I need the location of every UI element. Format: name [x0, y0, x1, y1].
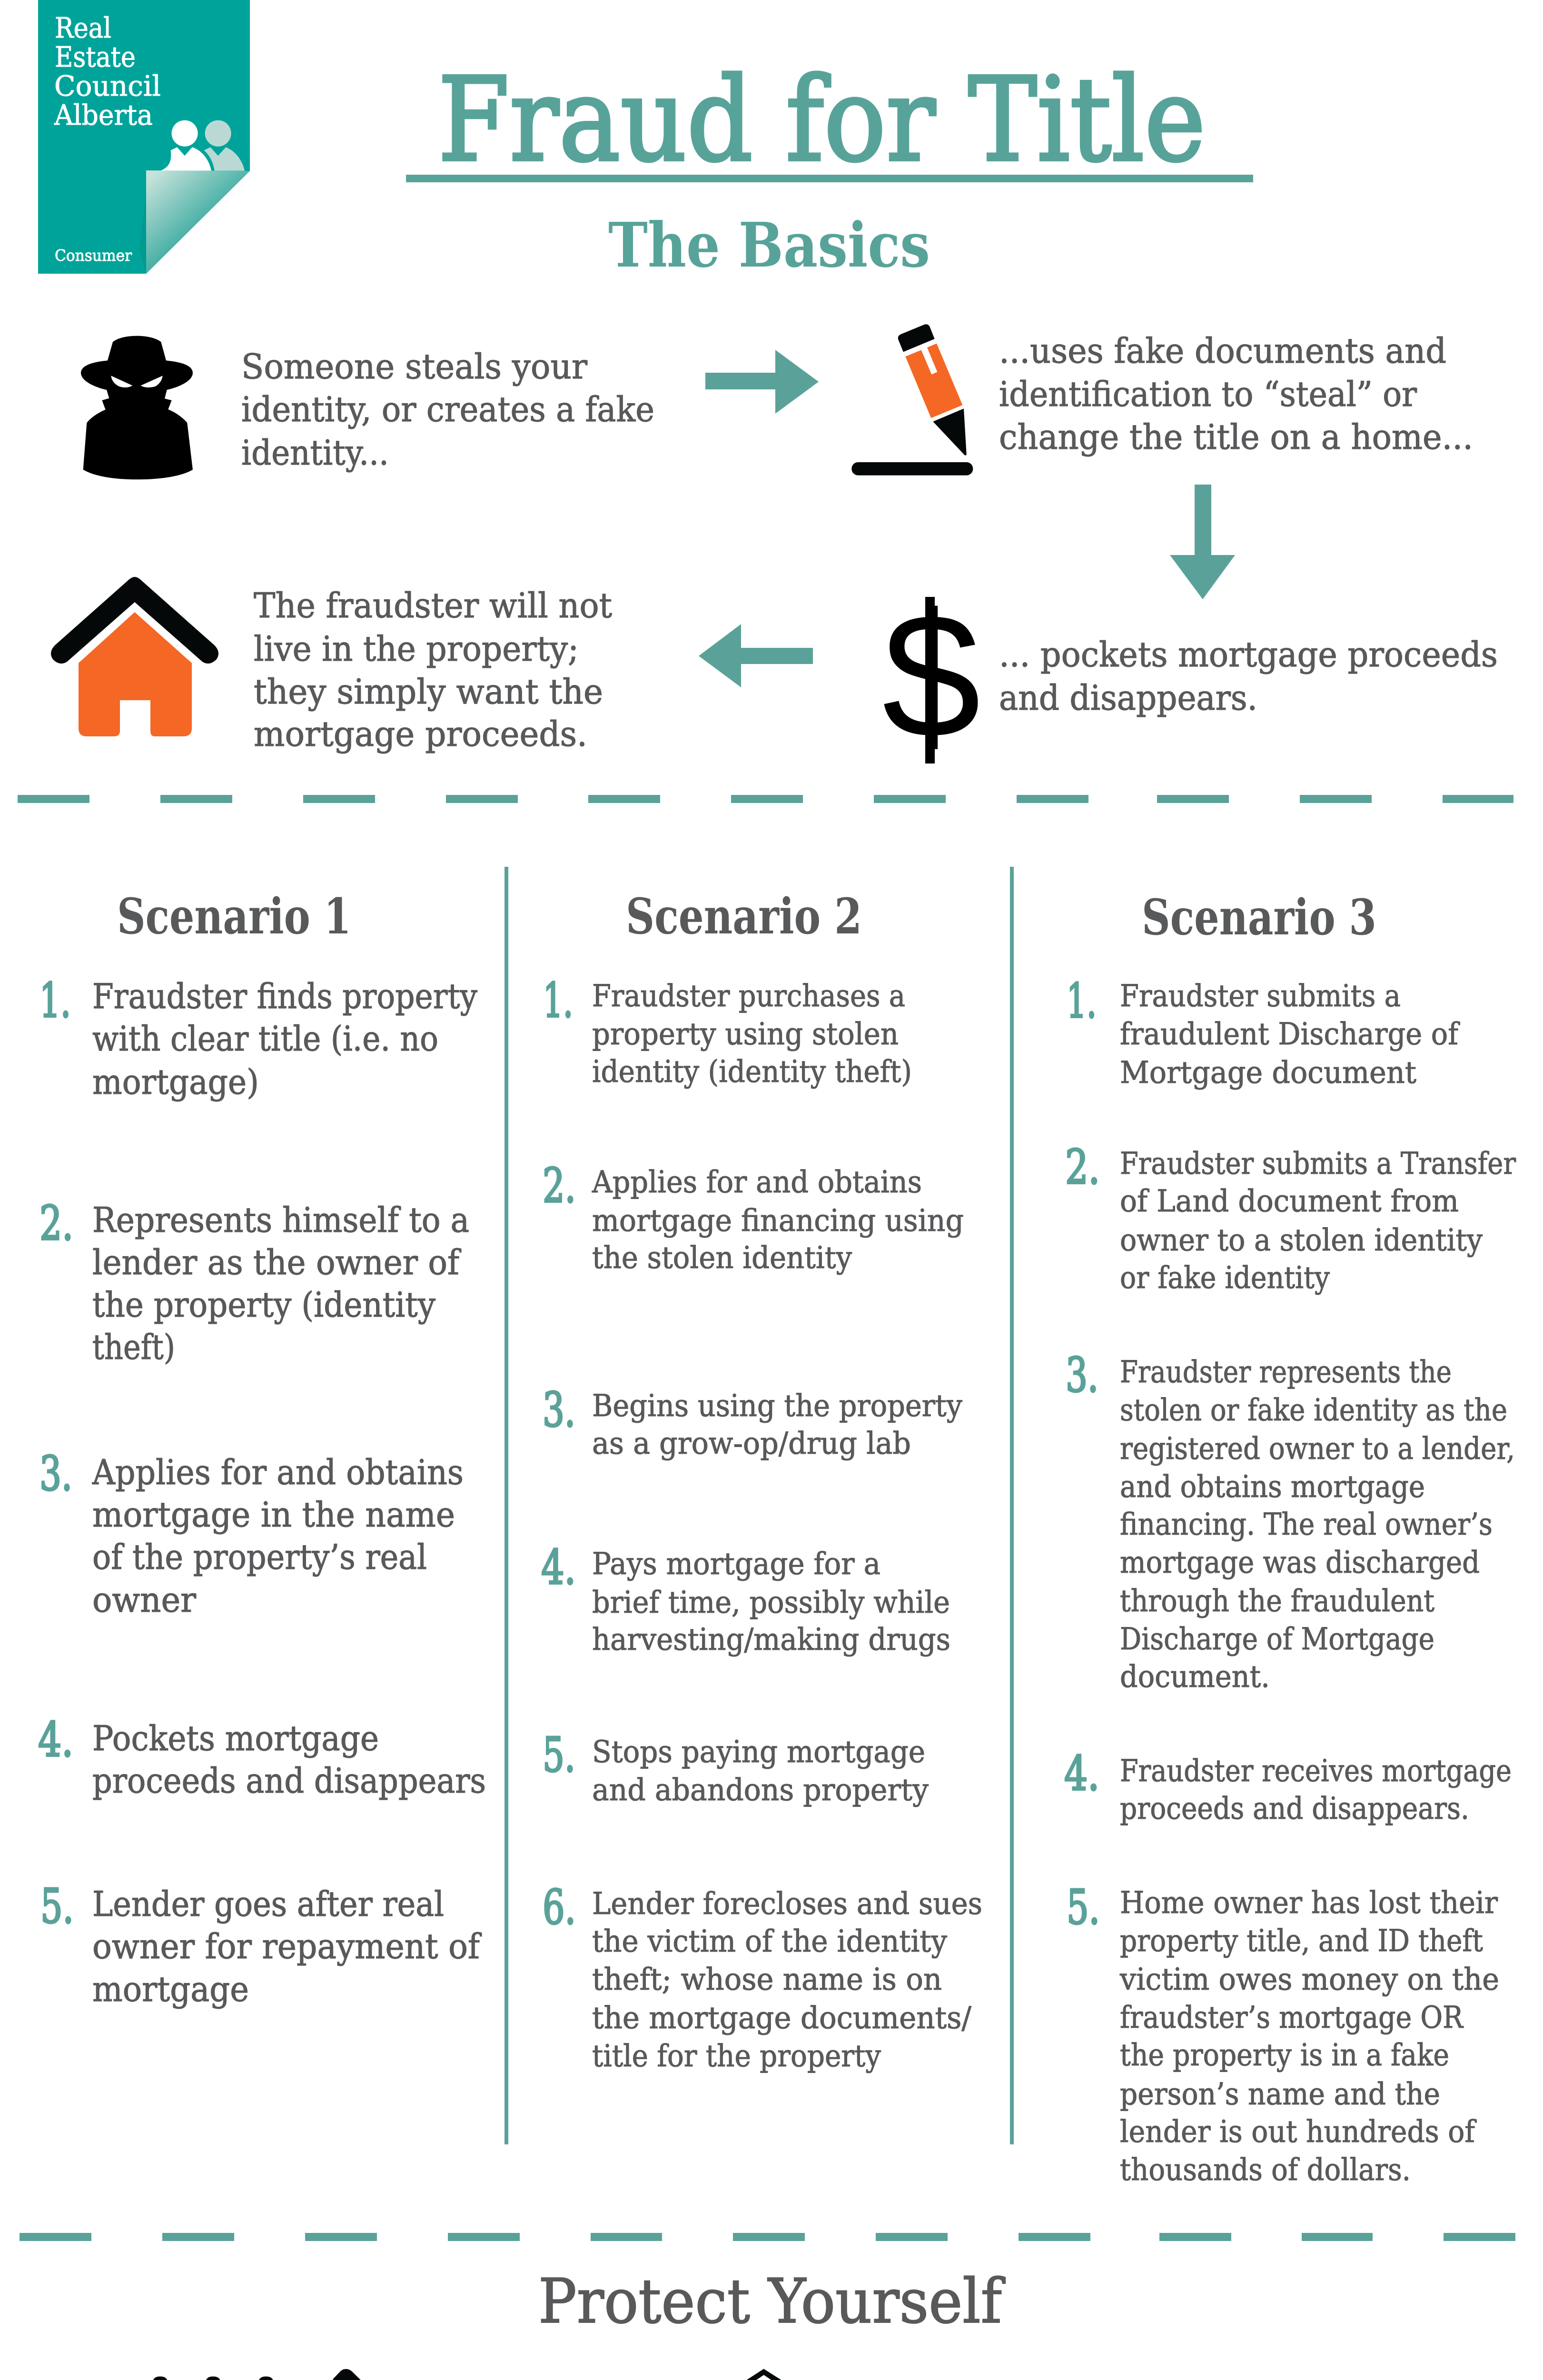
logo text: Consumer — [55, 246, 132, 265]
steps text: Fraudster represents the — [1120, 1355, 1452, 1390]
arrow: left — [699, 624, 813, 687]
step numbers: 3. — [543, 1383, 575, 1438]
step numbers: 1. — [543, 973, 573, 1028]
steps text: thousands of dollars. — [1120, 2152, 1411, 2188]
text: pockets mortgage proceeds: ... pockets mortgage proceeds — [999, 635, 1498, 674]
steps text — [1119, 979, 1516, 2188]
steps text: Pockets mortgage — [92, 1718, 379, 1758]
steps text: identity (identity theft) — [592, 1054, 912, 1090]
steps text: through the fraudulent — [1120, 1584, 1434, 1619]
title: Fraud for Title — [438, 53, 1206, 188]
steps text: mortgage in the name — [92, 1495, 455, 1535]
icon: dollar sign: $ — [882, 576, 980, 774]
steps text: lender as the owner of — [92, 1242, 461, 1282]
step numbers: 1. — [1067, 974, 1097, 1029]
icon: house — [51, 577, 218, 736]
steps text — [592, 979, 982, 2074]
steps text: with clear title (i.e. no — [92, 1019, 438, 1059]
step numbers: 2. — [543, 1159, 576, 1213]
step numbers — [1064, 974, 1100, 1935]
steps text: owner to a stolen identity — [1120, 1223, 1483, 1258]
logo people — [160, 120, 245, 171]
step numbers: 3. — [40, 1447, 72, 1501]
steps text: mortgage) — [92, 1062, 259, 1102]
steps text: harvesting/making drugs — [592, 1622, 950, 1657]
steps text: victim owes money on the — [1119, 1962, 1499, 1997]
steps text: owner — [92, 1580, 197, 1620]
steps text: mortgage — [92, 1969, 249, 2009]
steps text: and obtains mortgage — [1120, 1469, 1425, 1505]
logo text: Estate — [55, 40, 136, 73]
title underline — [406, 175, 1253, 182]
steps text: lender is out hundreds of — [1120, 2114, 1477, 2150]
steps text: Home owner has lost their — [1120, 1885, 1498, 1921]
steps text: Pays mortgage for a — [592, 1547, 880, 1582]
steps text: Fraudster purchases a — [592, 979, 905, 1014]
step numbers: 4. — [1064, 1746, 1099, 1801]
steps text: proceeds and disappears — [92, 1761, 486, 1801]
steps text: financing. The real owner’s — [1120, 1507, 1493, 1542]
steps text: Fraudster submits a — [1120, 979, 1401, 1014]
steps text: Discharge of Mortgage — [1120, 1622, 1434, 1657]
panel: scenario 1 — [38, 888, 486, 2009]
arrow: down — [1170, 485, 1235, 599]
panel: scenario 3 — [1064, 889, 1516, 2188]
step numbers: 2. — [1065, 1140, 1100, 1195]
text: someone steals your identity — [241, 347, 654, 473]
steps text: the property (identity — [92, 1285, 435, 1325]
step numbers: 2. — [40, 1196, 73, 1251]
steps text: of the property’s real — [92, 1537, 427, 1577]
text: uses fake documents: change the title on a home... — [999, 417, 1473, 457]
text: fraudster will not live: The fraudster will not — [254, 585, 612, 625]
icon: spy — [81, 336, 193, 479]
icon: pen — [851, 324, 973, 476]
text: someone steals your identity: Someone steals your — [241, 347, 588, 387]
steps text: or fake identity — [1120, 1260, 1330, 1296]
step numbers — [38, 973, 74, 1934]
text: uses fake documents: ...uses fake documents and — [999, 331, 1446, 371]
steps text: mortgage was discharged — [1120, 1545, 1480, 1580]
arrow: right — [705, 350, 819, 414]
step numbers: 3. — [1066, 1348, 1098, 1403]
step numbers: 4. — [541, 1540, 576, 1595]
steps text: Fraudster finds property — [92, 976, 477, 1016]
steps text: and abandons property — [592, 1773, 929, 1808]
logo text — [54, 11, 161, 265]
steps text: fraudulent Discharge of — [1120, 1017, 1460, 1052]
icon: notebook and pencil — [125, 2369, 369, 2380]
logo text: Alberta — [54, 99, 153, 131]
steps text: Applies for and obtains — [92, 1452, 464, 1492]
steps text — [92, 976, 486, 2009]
step numbers: 5. — [40, 1879, 74, 1934]
steps text: brief time, possibly while — [592, 1585, 950, 1620]
steps text: Mortgage document — [1120, 1055, 1416, 1091]
step numbers: 5. — [1067, 1880, 1100, 1935]
text: uses fake documents: identification to “steal” or — [999, 374, 1417, 414]
subtitle: The Basics — [608, 209, 930, 281]
steps text: Applies for and obtains — [592, 1165, 922, 1200]
steps text: document. — [1120, 1659, 1270, 1695]
step numbers: 6. — [543, 1880, 576, 1935]
steps text: the stolen identity — [592, 1240, 852, 1276]
steps text: property using stolen — [592, 1017, 899, 1052]
steps text: property title, and ID theft — [1120, 1924, 1483, 1959]
logo: Real Estate Council Alberta — [38, 0, 250, 274]
text: fraudster will not live — [254, 585, 612, 754]
text: someone steals your identity: identity... — [241, 433, 389, 473]
steps text: Begins using the property — [592, 1388, 962, 1424]
steps text: Represents himself to a — [92, 1200, 469, 1240]
steps text: as a grow-op/drug lab — [592, 1426, 911, 1461]
steps text: fraudster’s mortgage OR — [1120, 2000, 1464, 2035]
heading: scenario 3: Scenario 3 — [1142, 889, 1376, 946]
steps text: person’s name and the — [1120, 2077, 1440, 2112]
heading: scenario 2: Scenario 2 — [626, 888, 862, 945]
steps text: proceeds and disappears. — [1120, 1791, 1469, 1826]
step numbers — [541, 973, 576, 1935]
text: pockets mortgage proceeds — [999, 635, 1498, 718]
icon: bank — [684, 2369, 841, 2380]
steps text: theft) — [92, 1327, 175, 1367]
steps text: the mortgage documents/ — [592, 2001, 971, 2036]
logo text: Council — [54, 69, 161, 102]
text: fraudster will not live: they simply want the — [254, 672, 603, 712]
steps text: the victim of the identity — [592, 1924, 947, 1959]
text: pockets mortgage proceeds: and disappears. — [999, 678, 1257, 718]
steps text: Lender goes after real — [92, 1884, 444, 1924]
steps text: Lender forecloses and sues — [592, 1886, 982, 1922]
text: fraudster will not live: mortgage proceeds. — [254, 714, 587, 754]
heading: protect yourself: Protect Yourself — [538, 2266, 1006, 2337]
text: someone steals your identity: identity, or creates a fake — [241, 389, 654, 429]
step numbers: 5. — [543, 1728, 575, 1783]
text: uses fake documents — [999, 331, 1473, 457]
text: fraudster will not live: live in the property; — [254, 629, 579, 669]
step numbers: 4. — [38, 1713, 73, 1767]
steps text: owner for repayment of — [92, 1926, 482, 1966]
steps text: Stops paying mortgage — [592, 1735, 925, 1770]
step numbers: 1. — [40, 973, 71, 1028]
steps text: theft; whose name is on — [592, 1962, 942, 1997]
steps text: mortgage financing using — [592, 1203, 964, 1239]
steps text: title for the property — [592, 2039, 881, 2074]
steps text: of Land document from — [1120, 1184, 1459, 1219]
steps text: the property is in a fake — [1120, 2038, 1449, 2073]
panel: scenario 2 — [541, 888, 982, 2074]
heading: scenario 1: Scenario 1 — [117, 888, 351, 945]
logo text: Real — [55, 11, 111, 44]
